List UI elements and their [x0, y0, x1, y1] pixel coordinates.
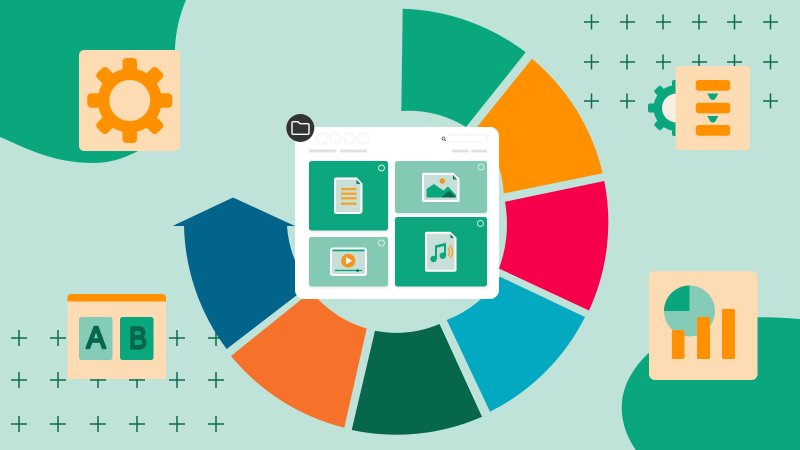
icon card: A B comparison: A [86, 320, 106, 355]
panel: file browser window [295, 127, 499, 299]
icon card: gear [79, 50, 180, 151]
icon: green gear behind flow card [648, 80, 705, 136]
tile: image [395, 161, 487, 213]
icon card: A B comparison [68, 294, 166, 379]
tile: music [395, 217, 487, 286]
segment: orange [477, 59, 603, 194]
icon card: A B comparison: B [129, 320, 147, 356]
toolbar lines [309, 150, 487, 152]
segment: green [401, 9, 526, 127]
icon card: flow chart [676, 66, 750, 150]
circular arrow diagram [172, 9, 608, 435]
segment: orange-red [231, 298, 367, 428]
icon card: chart [649, 271, 758, 380]
segment: teal [447, 277, 585, 412]
background blob: top left [0, 0, 186, 163]
icon: folder badge [286, 114, 314, 142]
segment: dark green [352, 324, 482, 435]
plus pattern: bottom left [11, 330, 224, 432]
background blob: bottom right [622, 317, 800, 450]
tile: video [309, 237, 388, 286]
search box [442, 135, 487, 142]
segment: blue arrow head [172, 198, 297, 349]
plus pattern: top right [584, 14, 778, 108]
window buttons [317, 134, 368, 143]
segment: red [499, 181, 608, 310]
icon: gear [87, 58, 172, 143]
tile: document [309, 161, 388, 230]
